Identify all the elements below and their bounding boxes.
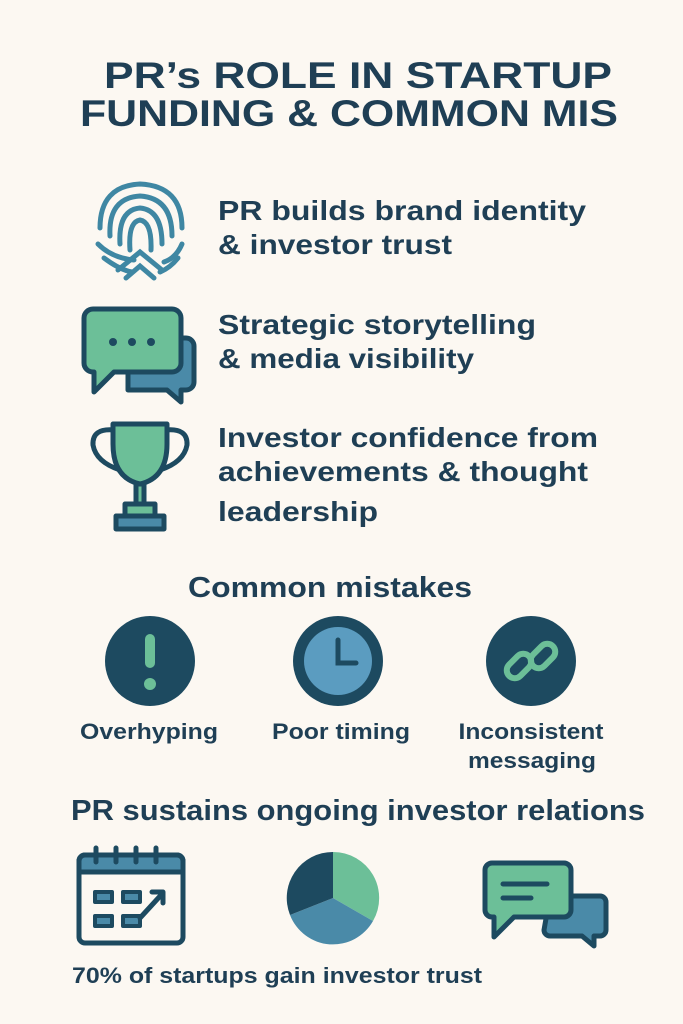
icon: chat bubbles bbox=[485, 863, 606, 946]
icon: clock bbox=[293, 616, 383, 706]
title: FUNDING & COMMON MIS bbox=[80, 93, 618, 134]
text: storytelling: Strategic storytelling bbox=[218, 309, 536, 340]
heading: common mistakes: Common mistakes bbox=[188, 572, 472, 604]
text: brand identity: PR builds brand identity bbox=[218, 195, 586, 226]
icon: fingerprint bbox=[98, 184, 182, 278]
title bbox=[80, 55, 618, 134]
text: investor confidence: Investor confidence from bbox=[218, 422, 598, 453]
text: storytelling bbox=[218, 309, 536, 374]
text: investor confidence: achievements & thought bbox=[218, 456, 588, 487]
text: statistic: 70% of startups gain investor trust bbox=[72, 963, 483, 988]
text: brand identity bbox=[218, 195, 586, 260]
heading: ongoing relations: PR sustains ongoing investor relations bbox=[71, 795, 645, 827]
icon: trophy bbox=[93, 424, 187, 529]
icon: exclamation bbox=[105, 616, 195, 706]
icon: link bbox=[486, 616, 576, 706]
text: brand identity: & investor trust bbox=[218, 229, 452, 260]
chart: pie bbox=[287, 852, 379, 944]
title: PR’s ROLE IN STARTUP bbox=[104, 55, 612, 96]
labels: mistakes: Overhyping bbox=[80, 719, 218, 744]
text: storytelling: & media visibility bbox=[218, 343, 474, 374]
labels: mistakes: Poor timing bbox=[272, 719, 410, 744]
labels: mistakes: messaging bbox=[468, 748, 596, 773]
icon: calendar bbox=[79, 848, 183, 943]
icon: speech bubbles bbox=[84, 309, 194, 402]
text: investor confidence: leadership bbox=[218, 496, 378, 527]
text: investor confidence bbox=[218, 422, 598, 527]
labels: mistakes bbox=[80, 719, 604, 773]
labels: mistakes: Inconsistent bbox=[458, 719, 604, 744]
